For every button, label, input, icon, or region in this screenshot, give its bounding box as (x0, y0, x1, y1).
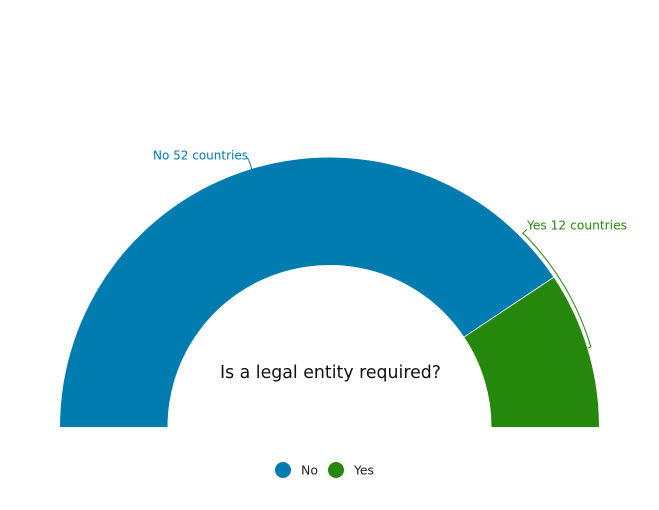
legend item: Yes: Yes (353, 464, 374, 478)
segment divider (464, 277, 554, 337)
bracket: Yes (523, 229, 591, 348)
label: No 52 countries: No 52 countries (153, 148, 248, 164)
segment: Yes 12 countries (464, 277, 599, 427)
chart title: Is a legal entity required? (220, 362, 441, 383)
leader line: No (247, 158, 252, 169)
label: Yes 12 countries: Yes 12 countries (526, 218, 627, 234)
legend item: No: No (301, 464, 318, 478)
segment: No 52 countries (60, 157, 554, 427)
legend (275, 462, 374, 478)
